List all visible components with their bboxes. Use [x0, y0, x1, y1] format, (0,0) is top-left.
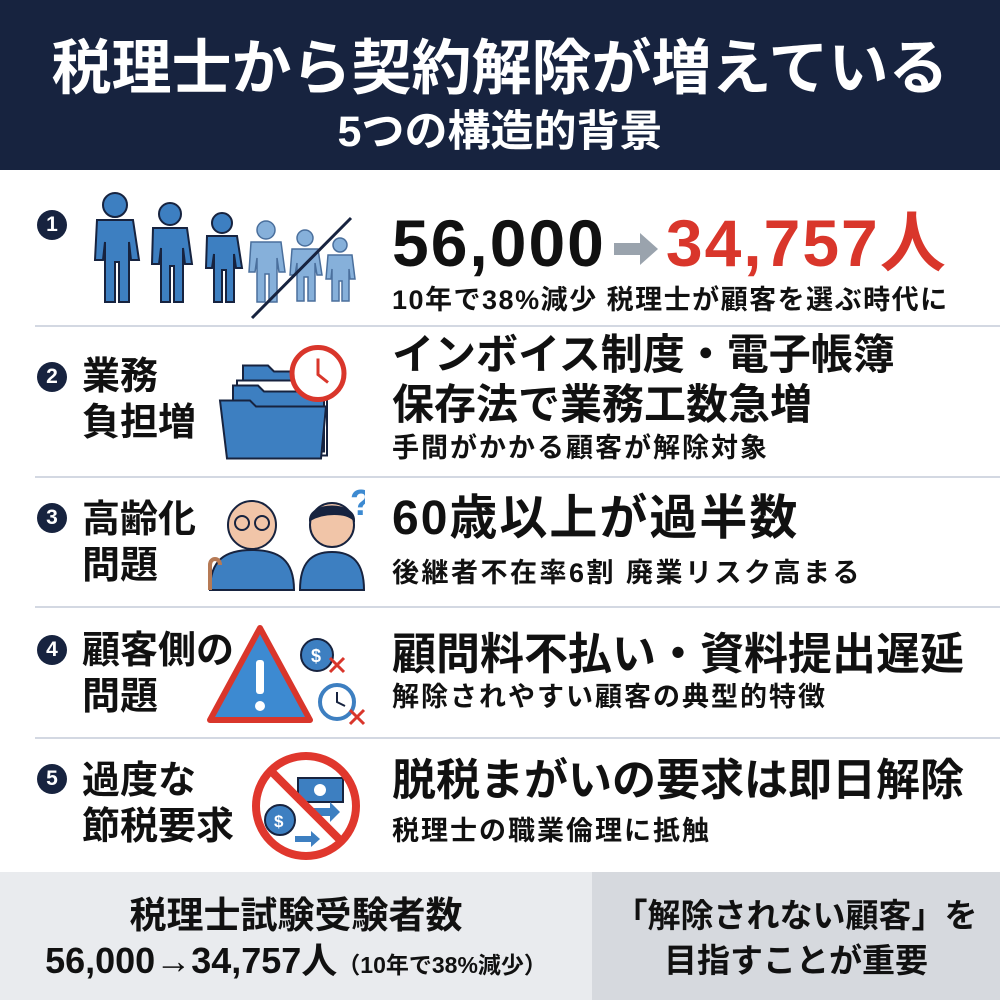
main text: インボイス制度・電子帳簿: [392, 331, 895, 378]
caption: 解除されやすい顧客の典型的特徴: [392, 682, 827, 712]
caption: 後継者不在率6割 廃業リスク高まる: [392, 558, 862, 588]
label: 顧客側の: [82, 630, 234, 672]
icon: warning with money/clock: [207, 625, 365, 725]
icon: warning with money/clock: $: [311, 646, 321, 666]
row 1: [37, 192, 949, 319]
label: [82, 356, 196, 444]
icon: prohibited money transfer: [252, 752, 360, 860]
row 2: [37, 331, 895, 463]
number 4: [37, 635, 67, 665]
number 2: [37, 362, 67, 392]
label: 負担増: [82, 402, 196, 444]
number 1: [37, 210, 67, 240]
caption: 10年で38%減少 税理士が顧客を選ぶ時代に: [392, 285, 949, 315]
row 3: [37, 485, 862, 591]
label: 節税要求: [82, 806, 234, 848]
number 3: 3: [46, 506, 58, 529]
number 2: 2: [46, 365, 58, 388]
label: 問題: [82, 676, 158, 718]
caption: 手間がかかる顧客が解除対象: [392, 433, 769, 463]
header: [0, 0, 1000, 170]
main text: [392, 331, 895, 428]
footer left: [0, 872, 592, 1000]
label: 過度な: [82, 760, 196, 802]
number 5: [37, 764, 67, 794]
icon: elderly and young: [208, 485, 365, 591]
big number change: 56,000 34,757人: [392, 206, 948, 280]
footer right callout: 「解除されない顧客」を: [614, 897, 978, 934]
footer left: 56,000→34,757人（10年で38%減少）: [45, 940, 547, 981]
footer right callout: [592, 872, 1000, 1000]
icon: prohibited money transfer: $: [274, 812, 284, 831]
number 4: 4: [46, 638, 58, 661]
label: [82, 760, 234, 848]
label: [82, 499, 196, 587]
label: [82, 630, 234, 718]
icon: people decreasing: [94, 192, 356, 319]
number 5: 5: [46, 767, 58, 790]
label: 業務: [82, 356, 158, 398]
caption: 税理士の職業倫理に抵触: [392, 816, 711, 846]
main text: 60歳以上が過半数: [392, 492, 799, 545]
title: 税理士から契約解除が増えている: [52, 35, 948, 102]
number 1: 1: [46, 213, 58, 236]
main text: 顧問料不払い・資料提出遅延: [392, 630, 964, 679]
label: 高齢化: [82, 499, 196, 541]
row 5: [37, 752, 964, 860]
row 4: [37, 625, 964, 725]
icon: folders with clock: [218, 345, 346, 460]
number 3: [37, 503, 67, 533]
footer right callout: 目指すことが重要: [664, 942, 928, 979]
subtitle: 5つの構造的背景: [338, 108, 662, 156]
main text: 脱税まがいの要求は即日解除: [392, 756, 964, 805]
footer left: 税理士試験受験者数: [130, 895, 462, 936]
main text: 保存法で業務工数急増: [392, 381, 812, 428]
label: 問題: [82, 545, 158, 587]
